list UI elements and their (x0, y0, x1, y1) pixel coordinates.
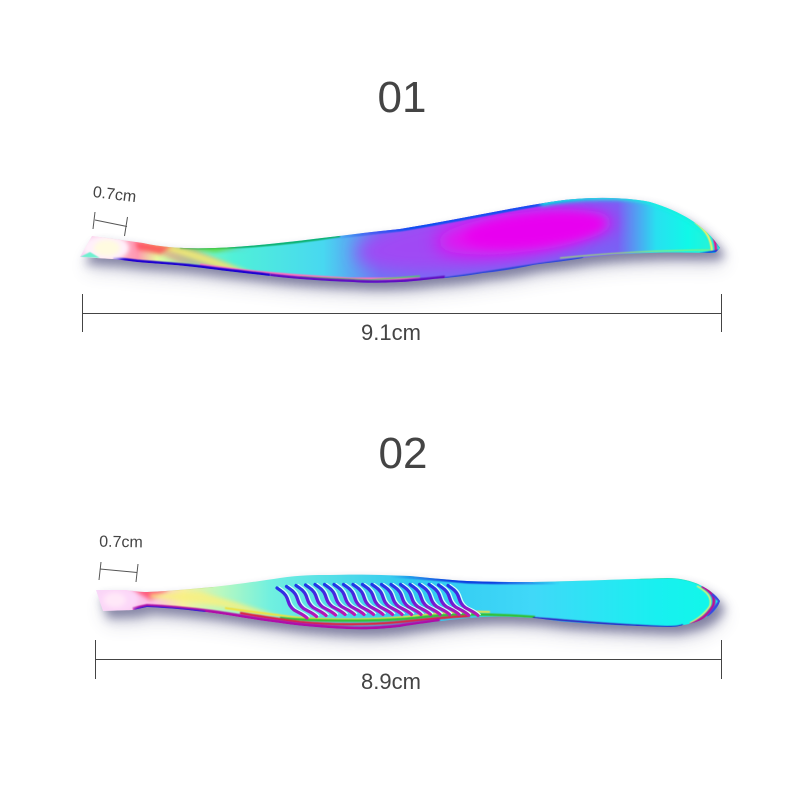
tweezer 01 iridescent body (80, 198, 720, 283)
bottom rim (200, 265, 420, 279)
label: 9.1cm: 9.1cm (361, 320, 421, 345)
small dimension bracket 01 (93, 212, 128, 236)
tweezer 02 iridescent body (96, 574, 720, 630)
dimension line 01 (82, 294, 722, 332)
label: 0.7cm bottom: 0.7cm (99, 534, 143, 551)
colour fan near tip (142, 243, 238, 267)
tweezer 02 (90, 565, 730, 642)
tip highlight (108, 590, 140, 611)
label: 8.9cm: 8.9cm (361, 669, 421, 694)
title: 02: 02 (379, 429, 427, 478)
tweezer 02 shadow (101, 582, 725, 642)
label: 0.7cm top: 0.7cm (92, 184, 137, 206)
small dimension bracket 02 (99, 562, 138, 582)
title: 01: 01 (378, 73, 426, 122)
tip highlight (83, 235, 129, 261)
nose rim (695, 222, 712, 251)
top rim (390, 575, 560, 582)
tweezer 01 (70, 190, 730, 296)
top rim (330, 198, 600, 237)
nose rim (690, 586, 710, 623)
bottom rainbow rim (225, 608, 490, 619)
dimension line 02 (95, 640, 722, 679)
colour fan near tip (130, 588, 170, 600)
tweezer 01 shadow (85, 205, 725, 296)
grip ridges (277, 584, 480, 618)
